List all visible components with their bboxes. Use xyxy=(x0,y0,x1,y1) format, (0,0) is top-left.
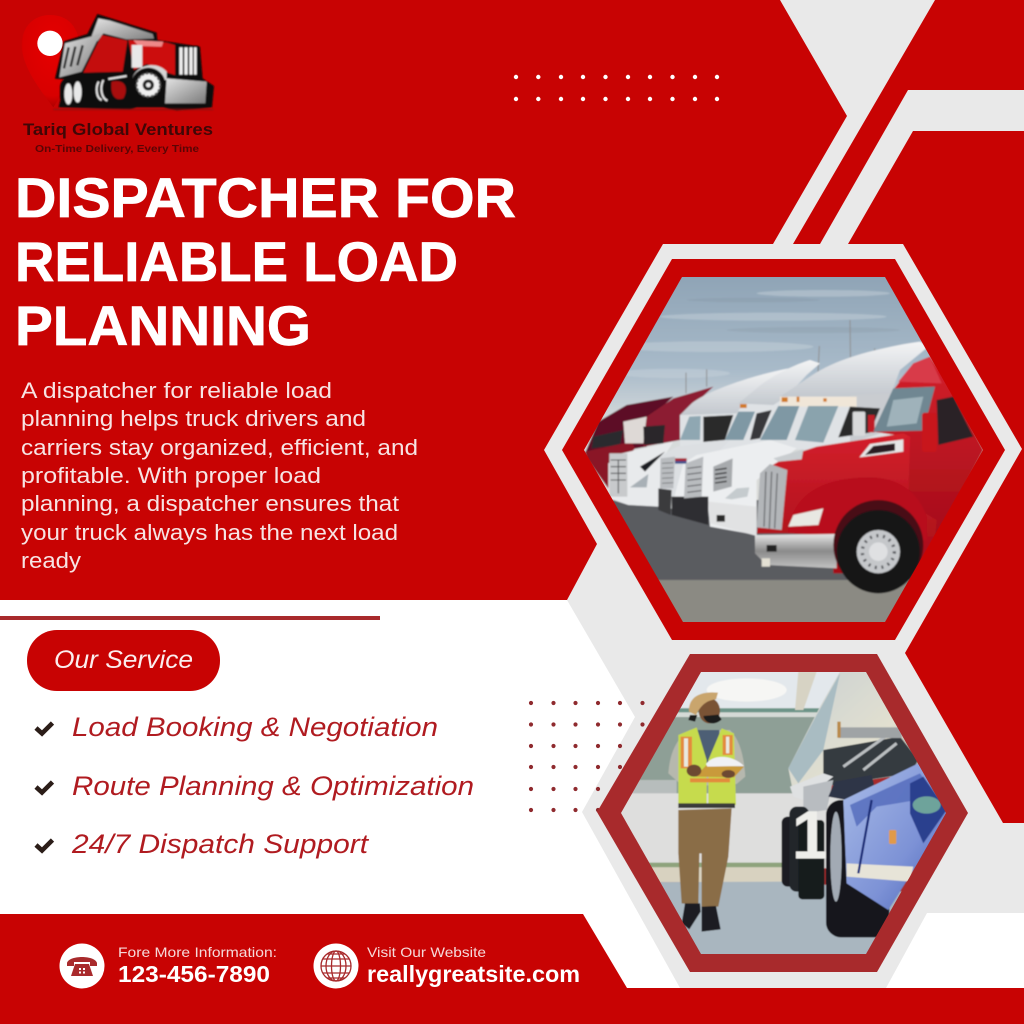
grilles xyxy=(609,453,733,498)
main tyre xyxy=(826,800,889,937)
dark red hexagon frame for inspector photo xyxy=(597,654,968,972)
tanker trailer xyxy=(788,672,923,793)
description text xyxy=(21,378,418,573)
divider line xyxy=(0,616,380,620)
panel: right red block xyxy=(848,131,1024,823)
photo: inspector with clipboard beside tanker xyxy=(617,670,950,960)
maroon trucks xyxy=(585,397,673,453)
contact: website: reallygreatsite.com xyxy=(367,961,580,987)
red truck grille and headlight xyxy=(757,464,787,530)
our service pill button: Our Service xyxy=(54,646,193,674)
decorative dots: white grid xyxy=(514,75,719,101)
icon: dump truck xyxy=(53,14,214,111)
description text: ready xyxy=(21,548,82,573)
logo: pin and dump truck xyxy=(22,14,214,111)
title xyxy=(15,166,516,357)
red truck hood xyxy=(757,433,937,573)
contact: website xyxy=(367,944,580,987)
description text: profitable. With proper load xyxy=(21,463,321,488)
blue fender xyxy=(843,763,950,910)
panel: top right red chevron band xyxy=(793,0,1024,244)
contact: phone: Fore More Information: xyxy=(118,944,277,960)
icon: telephone xyxy=(60,944,104,988)
description text: planning, a dispatcher ensures that xyxy=(21,491,400,516)
red truck wheel xyxy=(832,499,924,569)
windows on white trucks xyxy=(680,416,701,440)
description text: your truck always has the next load xyxy=(21,520,398,545)
item: route planning: Route Planning & Optimization xyxy=(72,771,474,801)
decorative dots: dark red grid xyxy=(529,701,645,812)
our service pill button xyxy=(27,630,220,691)
description text: planning helps truck drivers and xyxy=(21,406,366,431)
panel: footer red band xyxy=(0,914,1024,1024)
icon: globe xyxy=(314,944,358,988)
item: dispatch support: 24/7 Dispatch Support xyxy=(71,829,370,859)
icon: location pin xyxy=(22,15,78,107)
contact: website: Visit Our Website xyxy=(367,944,486,960)
title: RELIABLE LOAD xyxy=(15,230,458,293)
inspector figure xyxy=(678,808,732,907)
white truck hoods xyxy=(608,442,673,507)
panel: main red header area xyxy=(0,0,847,600)
red hexagon frame for truck photo xyxy=(562,259,1005,640)
contact: phone: 123-456-7890 xyxy=(118,961,270,987)
white truck base behind windows xyxy=(678,401,888,449)
description text: A dispatcher for reliable load xyxy=(21,378,332,403)
boots xyxy=(682,903,701,929)
white truck fairings xyxy=(680,368,788,415)
red truck cab xyxy=(873,357,983,540)
antennas xyxy=(684,320,876,394)
service list xyxy=(36,712,474,859)
logo tagline: On-Time Delivery, Every Time xyxy=(35,143,199,155)
head xyxy=(699,698,720,723)
title: DISPATCHER FOR xyxy=(15,166,516,229)
tanker rear wheels xyxy=(781,816,790,888)
description text: carriers stay organized, efficient, and xyxy=(21,435,418,460)
item: load booking: Load Booking & Negotiation xyxy=(72,712,438,742)
fleet number on mudflap: 1 xyxy=(792,797,830,873)
photo: row of parked trucks xyxy=(573,273,1007,623)
contact: phone xyxy=(118,944,277,987)
logo name: Tariq Global Ventures xyxy=(23,121,213,139)
title: PLANNING xyxy=(15,294,311,357)
